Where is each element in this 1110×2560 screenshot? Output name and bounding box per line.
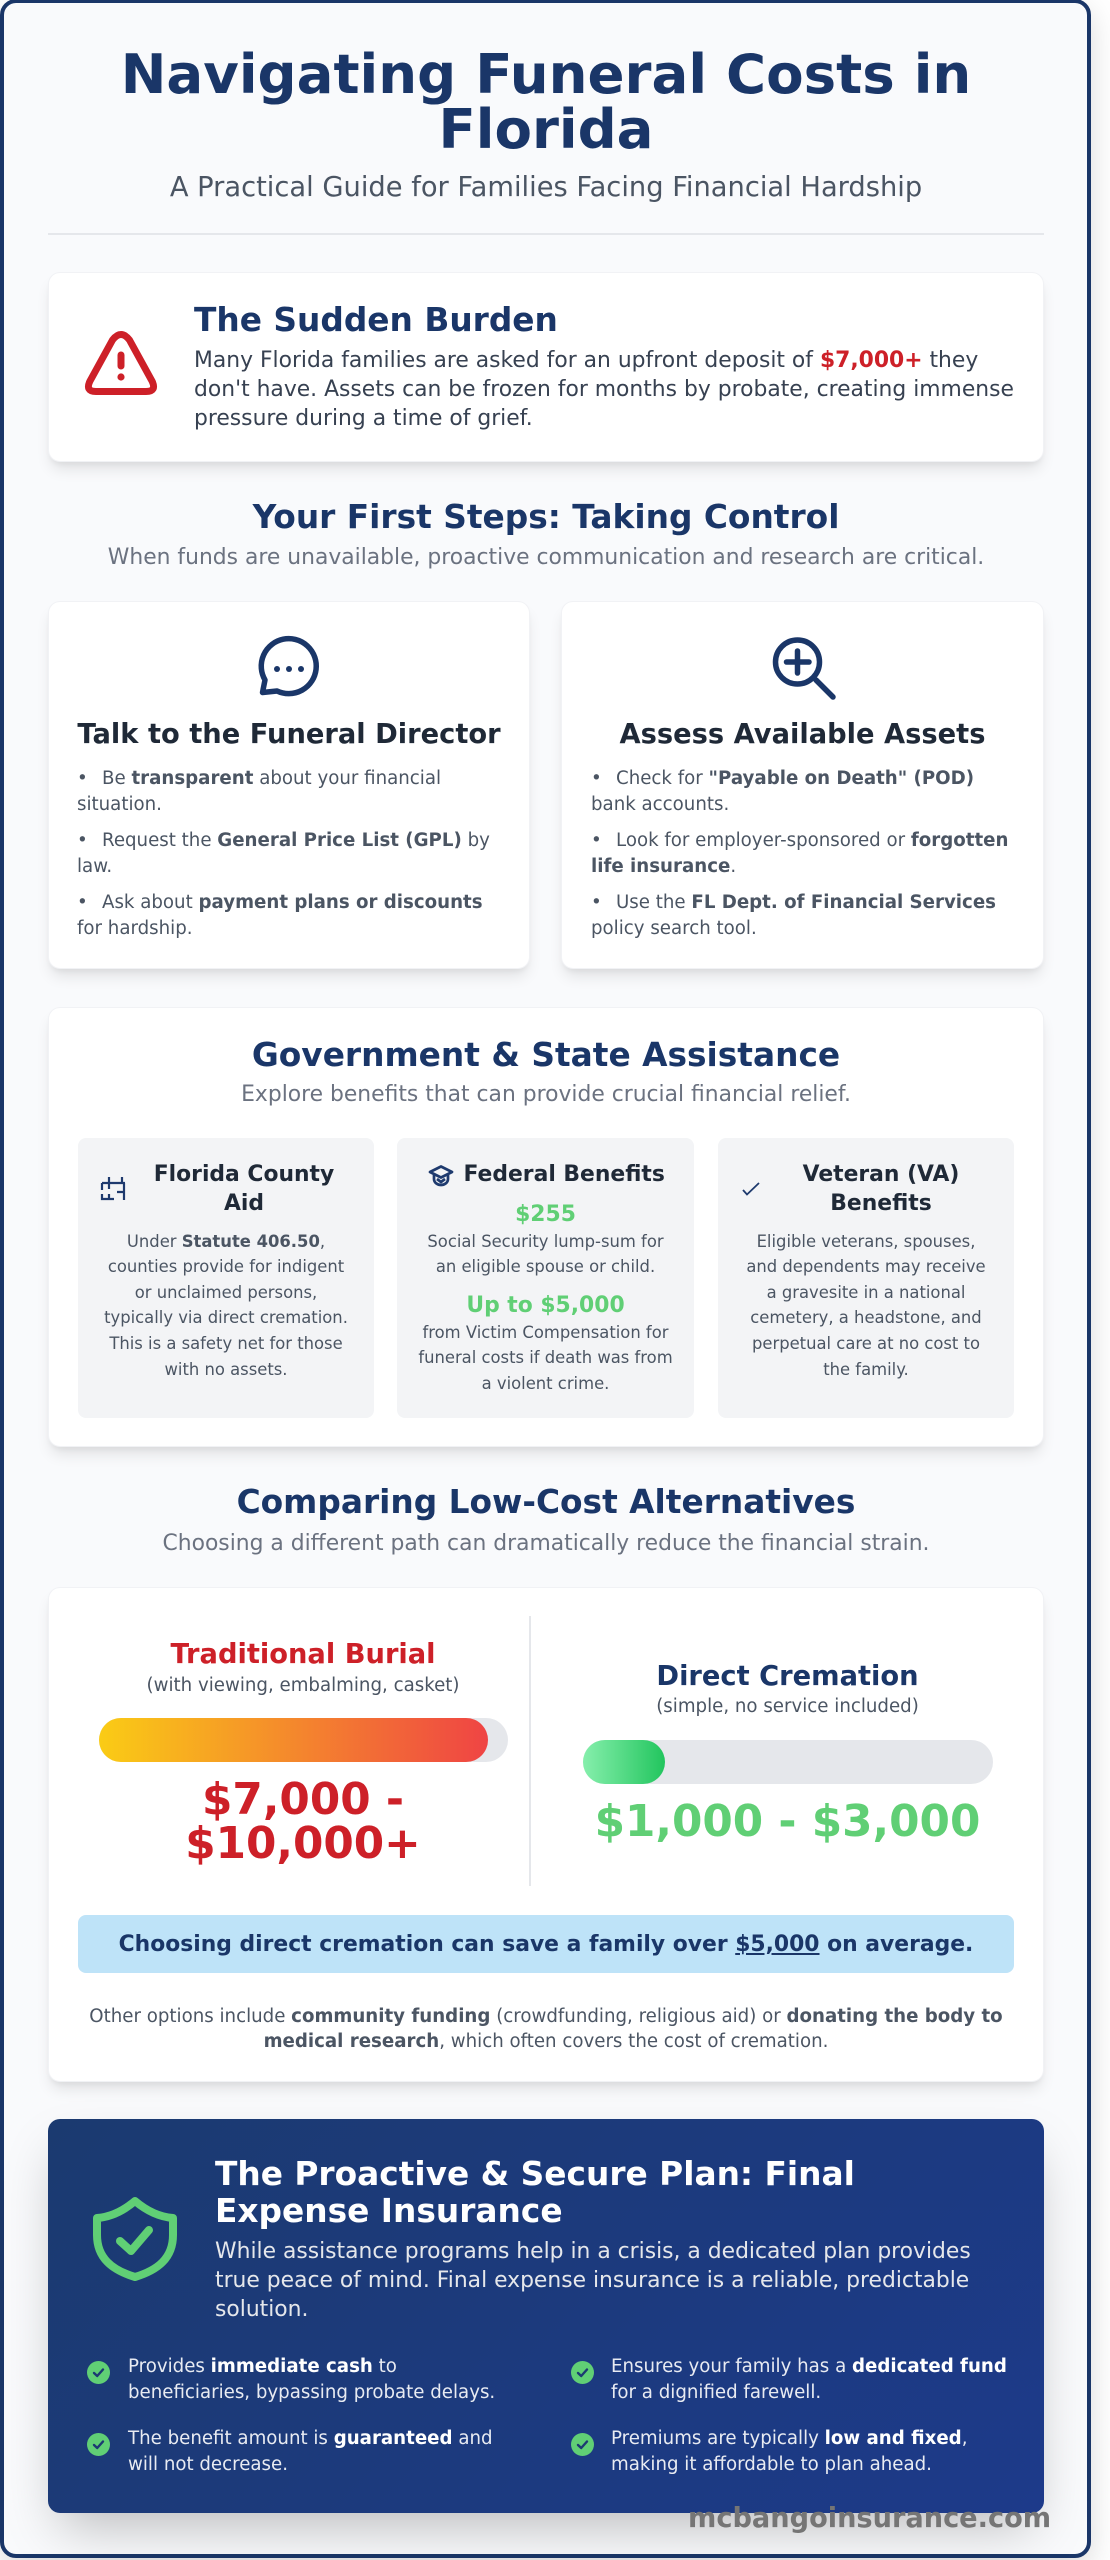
panel: cost comparison xyxy=(48,1587,1044,2082)
benefit: low fixed premiums xyxy=(571,2428,967,2475)
heading: veteran benefits xyxy=(802,1162,959,1216)
text: victim compensation note: a violent crime. xyxy=(482,1374,609,1393)
sub-panel: federal benefits xyxy=(397,1138,694,1418)
heading: talk to the funeral director: Talk to the Funeral Director xyxy=(77,719,501,750)
text: guaranteed amount: The benefit amount is guaranteed and xyxy=(128,2428,493,2449)
stat: social security amount: $255 xyxy=(515,1202,576,1227)
section header: first steps xyxy=(108,498,984,570)
heading: proactive plan: The Proactive & Secure Plan: Final xyxy=(215,2155,855,2193)
text: dedicated fund xyxy=(611,2356,1007,2403)
text: dedicated fund: for a dignified farewell. xyxy=(611,2382,821,2403)
benefit: guaranteed amount xyxy=(87,2428,493,2475)
text: traditional burial note: (with viewing, embalming, casket) xyxy=(146,1675,460,1696)
list item: payable on death: bank accounts. xyxy=(591,794,729,815)
list item: price list: Request the General Price List (GPL) by xyxy=(102,830,490,851)
icon: chat bubble xyxy=(258,636,319,696)
benefit: dedicated fund xyxy=(571,2356,1007,2403)
text: veteran description: a gravesite in a national xyxy=(767,1283,965,1302)
heading: florida county aid: Aid xyxy=(224,1191,264,1216)
heading: comparing alternatives: Comparing Low-Cost Alternatives xyxy=(237,1483,855,1521)
text: veteran description xyxy=(746,1232,986,1379)
list item: payment plans: for hardship. xyxy=(77,918,193,939)
stat: victim compensation amount: Up to $5,000 xyxy=(466,1293,625,1318)
text: county aid description: with no assets. xyxy=(164,1360,288,1379)
stat: traditional burial price xyxy=(185,1774,421,1868)
sub-panel: florida county aid xyxy=(78,1138,374,1418)
list item: price list xyxy=(77,830,490,877)
list item: payable on death: • xyxy=(591,768,602,789)
icon: federal cap xyxy=(428,1165,454,1186)
list item: life insurance: • xyxy=(591,830,602,851)
panel: the sudden burden xyxy=(48,272,1044,462)
bar: direct cremation cost xyxy=(583,1740,993,1784)
text: county aid description: typically via direct cremation. xyxy=(104,1308,348,1327)
icon: green check xyxy=(87,2361,110,2384)
text: savings message: Choosing direct cremation can save a family over $5,000 on average. xyxy=(119,1932,973,1957)
list item: life insurance xyxy=(591,830,1008,877)
list item: life insurance: life insurance. xyxy=(591,856,736,877)
text: veteran description: the family. xyxy=(823,1360,909,1379)
text: comparing subtitle: Choosing a different path can dramatically reduce the financial strain. xyxy=(162,1531,930,1556)
heading: florida county aid: Florida County xyxy=(154,1162,334,1187)
text: victim compensation note: funeral costs if death was from xyxy=(418,1348,673,1367)
list item: payment plans: Ask about payment plans or discounts xyxy=(102,892,483,913)
text: victim compensation note: from Victim Compensation for xyxy=(422,1323,668,1342)
heading: traditional burial: Traditional Burial xyxy=(170,1639,436,1670)
title xyxy=(121,42,971,161)
text: proactive plan description: solution. xyxy=(215,2297,308,2322)
text: burden description xyxy=(194,348,1014,430)
heading: federal benefits: Federal Benefits xyxy=(464,1162,665,1187)
heading: veteran benefits: Veteran (VA) xyxy=(803,1162,959,1187)
text: social security note: an eligible spouse or child. xyxy=(436,1257,655,1276)
list item: payable on death: Check for "Payable on Death" (POD) xyxy=(616,768,974,789)
text: social security note: Social Security lump-sum for xyxy=(427,1232,664,1251)
list item: payment plans: • xyxy=(77,892,88,913)
title: Navigating Funeral Costs in xyxy=(121,42,971,106)
list item: policy search xyxy=(591,892,996,939)
heading: assess available assets: Assess Available Assets xyxy=(620,719,985,750)
text: county aid description xyxy=(104,1232,348,1379)
title: Florida xyxy=(438,97,654,161)
icon: warning triangle xyxy=(84,331,158,395)
text: burden description: pressure during a time of grief. xyxy=(194,406,533,430)
text: burden description: Many Florida families are asked for an upfront deposit of $7,000+ they xyxy=(194,348,978,372)
list item: transparency: • xyxy=(77,768,88,789)
text: veteran description: Eligible veterans, spouses, xyxy=(757,1232,975,1251)
text: other options: Other options include community funding (crowdfunding, religious aid) or donating the body to xyxy=(89,2006,1003,2026)
heading: veteran benefits: Benefits xyxy=(830,1191,932,1216)
benefit: immediate cash xyxy=(87,2356,495,2403)
icon: magnifier with plus xyxy=(772,637,836,700)
list item: transparency xyxy=(77,768,441,815)
stat: traditional burial price: $10,000+ xyxy=(185,1818,421,1868)
heading: direct cremation: Direct Cremation xyxy=(656,1661,919,1692)
text: immediate cash: beneficiaries, bypassing probate delays. xyxy=(128,2382,495,2403)
heading: government assistance: Government & State Assistance xyxy=(252,1036,840,1074)
list item: price list: law. xyxy=(77,856,112,877)
text: first steps subtitle: When funds are unavailable, proactive communication and research are critical. xyxy=(108,544,984,570)
text: other options xyxy=(89,2006,1003,2052)
text: guaranteed amount: will not decrease. xyxy=(128,2454,288,2475)
text: proactive plan description: true peace of mind. Final expense insurance is a reliable, predictable xyxy=(215,2268,969,2293)
icon: green check xyxy=(87,2433,110,2456)
icon: county map xyxy=(100,1177,126,1200)
text: burden description: don't have. Assets can be frozen for months by probate, creating immense xyxy=(194,376,1014,402)
icon: green check xyxy=(571,2433,594,2456)
stat: traditional burial price: $7,000 - xyxy=(202,1774,404,1824)
panel: government and state assistance xyxy=(48,1007,1044,1447)
text: dedicated fund: Ensures your family has a dedicated fund xyxy=(611,2356,1007,2377)
text: other options: medical research, which often covers the cost of cremation. xyxy=(264,2030,828,2052)
icon: shield with check xyxy=(93,2197,177,2281)
text: social security note xyxy=(427,1232,664,1276)
heading: first steps: Your First Steps: Taking Control xyxy=(253,498,839,536)
text: victim compensation note xyxy=(418,1323,673,1393)
text: county aid description: This is a safety net for those xyxy=(109,1334,343,1353)
text: government subtitle: Explore benefits that can provide crucial financial relief. xyxy=(241,1082,851,1106)
list item: policy search: • xyxy=(591,892,602,913)
heading: proactive plan xyxy=(215,2155,855,2230)
list item: policy search: policy search tool. xyxy=(591,918,757,939)
heading: florida county aid xyxy=(154,1162,334,1216)
text: veteran description: and dependents may receive xyxy=(746,1257,986,1276)
watermark: mcbangoinsurance.com xyxy=(688,2503,1051,2534)
text: direct cremation note: (simple, no service included) xyxy=(656,1696,919,1716)
list item: payable on death xyxy=(591,768,974,815)
list item: policy search: Use the FL Dept. of Financial Services xyxy=(616,892,996,913)
text: veteran description: cemetery, a headstone, and xyxy=(750,1308,982,1327)
text: county aid description: or unclaimed persons, xyxy=(135,1283,317,1302)
panel: talk to the funeral director xyxy=(48,601,530,969)
text: veteran description: perpetual care at no cost to xyxy=(752,1334,980,1353)
text: immediate cash: Provides immediate cash to xyxy=(128,2356,397,2377)
icon: green check xyxy=(571,2361,594,2384)
list item: payment plans xyxy=(77,892,483,939)
list item: price list: • xyxy=(77,830,88,851)
text: county aid description: counties provide for indigent xyxy=(108,1257,344,1276)
callout: savings xyxy=(78,1915,1014,1973)
icon: check mark xyxy=(742,1182,760,1196)
list item: transparency: situation. xyxy=(77,794,162,815)
text: low fixed premiums: Premiums are typically low and fixed, xyxy=(611,2428,967,2449)
list item: transparency: Be transparent about your financial xyxy=(102,768,441,789)
heading: the sudden burden: The Sudden Burden xyxy=(194,301,558,339)
list item: life insurance: Look for employer-sponsored or forgotten xyxy=(616,830,1008,851)
section header: comparing alternatives xyxy=(162,1483,930,1556)
text: immediate cash xyxy=(128,2356,495,2403)
text: low fixed premiums: making it affordable to plan ahead. xyxy=(611,2454,932,2475)
subtitle: A Practical Guide for Families Facing Financial Hardship xyxy=(170,172,922,203)
bar: traditional burial cost xyxy=(99,1718,508,1762)
sub-panel: veteran benefits xyxy=(718,1138,1014,1418)
text: guaranteed amount xyxy=(128,2428,493,2475)
panel: assess available assets xyxy=(561,601,1044,969)
text: county aid description: Under Statute 406.50, xyxy=(127,1232,325,1251)
text: low fixed premiums xyxy=(611,2428,967,2475)
text: proactive plan description: While assistance programs help in a crisis, a dedicated plan provides xyxy=(215,2239,971,2264)
text: proactive plan description xyxy=(215,2239,971,2322)
heading: proactive plan: Expense Insurance xyxy=(215,2192,563,2230)
stat: direct cremation price: $1,000 - $3,000 xyxy=(595,1796,980,1846)
panel: final expense insurance xyxy=(48,2119,1044,2513)
